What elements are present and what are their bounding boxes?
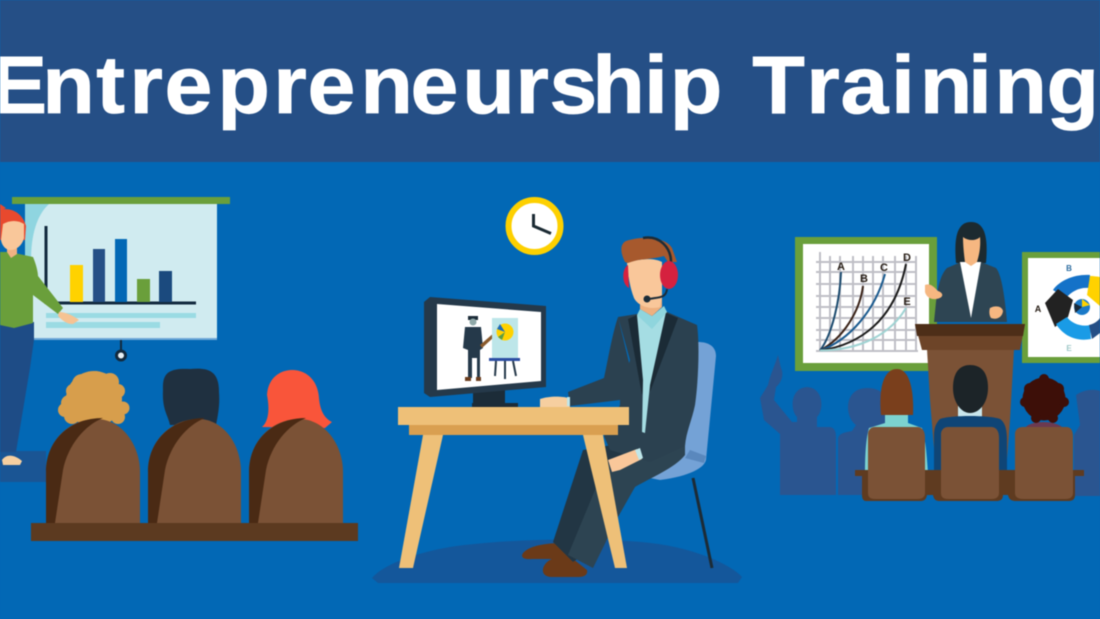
panel: classroom presentation — [0, 197, 358, 541]
legs — [553, 440, 640, 562]
title banner — [0, 0, 1100, 162]
lapels — [628, 315, 646, 395]
chart board A to E: A — [837, 261, 845, 273]
hands — [540, 397, 570, 407]
hair — [621, 238, 677, 263]
man in suit — [522, 238, 698, 577]
floor shadow — [372, 539, 742, 583]
chart board A to E: C — [880, 262, 888, 274]
donut chart board — [1022, 252, 1100, 363]
donut chart board: B — [1066, 264, 1072, 273]
projector screen with bar chart — [12, 197, 230, 360]
chart board A to E — [795, 237, 937, 371]
headset — [643, 238, 671, 262]
desk — [398, 407, 629, 568]
donut chart board: A — [1035, 304, 1042, 314]
neck — [640, 295, 662, 316]
panel: lecture hall — [760, 222, 1100, 501]
chart board A to E: D — [903, 252, 911, 264]
podium — [915, 324, 1025, 472]
computer monitor with video — [424, 297, 546, 407]
donut chart board: E — [1066, 344, 1072, 353]
face — [627, 259, 662, 308]
presenter woman — [0, 204, 79, 465]
chart board A to E: B — [860, 273, 868, 285]
audience seats — [855, 427, 1084, 501]
chair — [650, 342, 716, 568]
title banner: Entrepreneurship Training — [0, 39, 1099, 131]
video presenter — [463, 316, 520, 381]
shirt — [637, 312, 666, 433]
panel: online training at desk — [372, 200, 742, 583]
shoes — [522, 543, 568, 559]
speaker woman — [925, 222, 1007, 322]
floor shadow — [0, 451, 46, 482]
front row attendees — [865, 365, 1069, 472]
jacket — [604, 312, 698, 462]
chart board A to E: E — [903, 296, 911, 308]
wall clock — [508, 200, 560, 252]
audience hair — [58, 369, 332, 428]
silhouetted audience — [760, 355, 1100, 496]
audience chairs — [31, 418, 358, 541]
